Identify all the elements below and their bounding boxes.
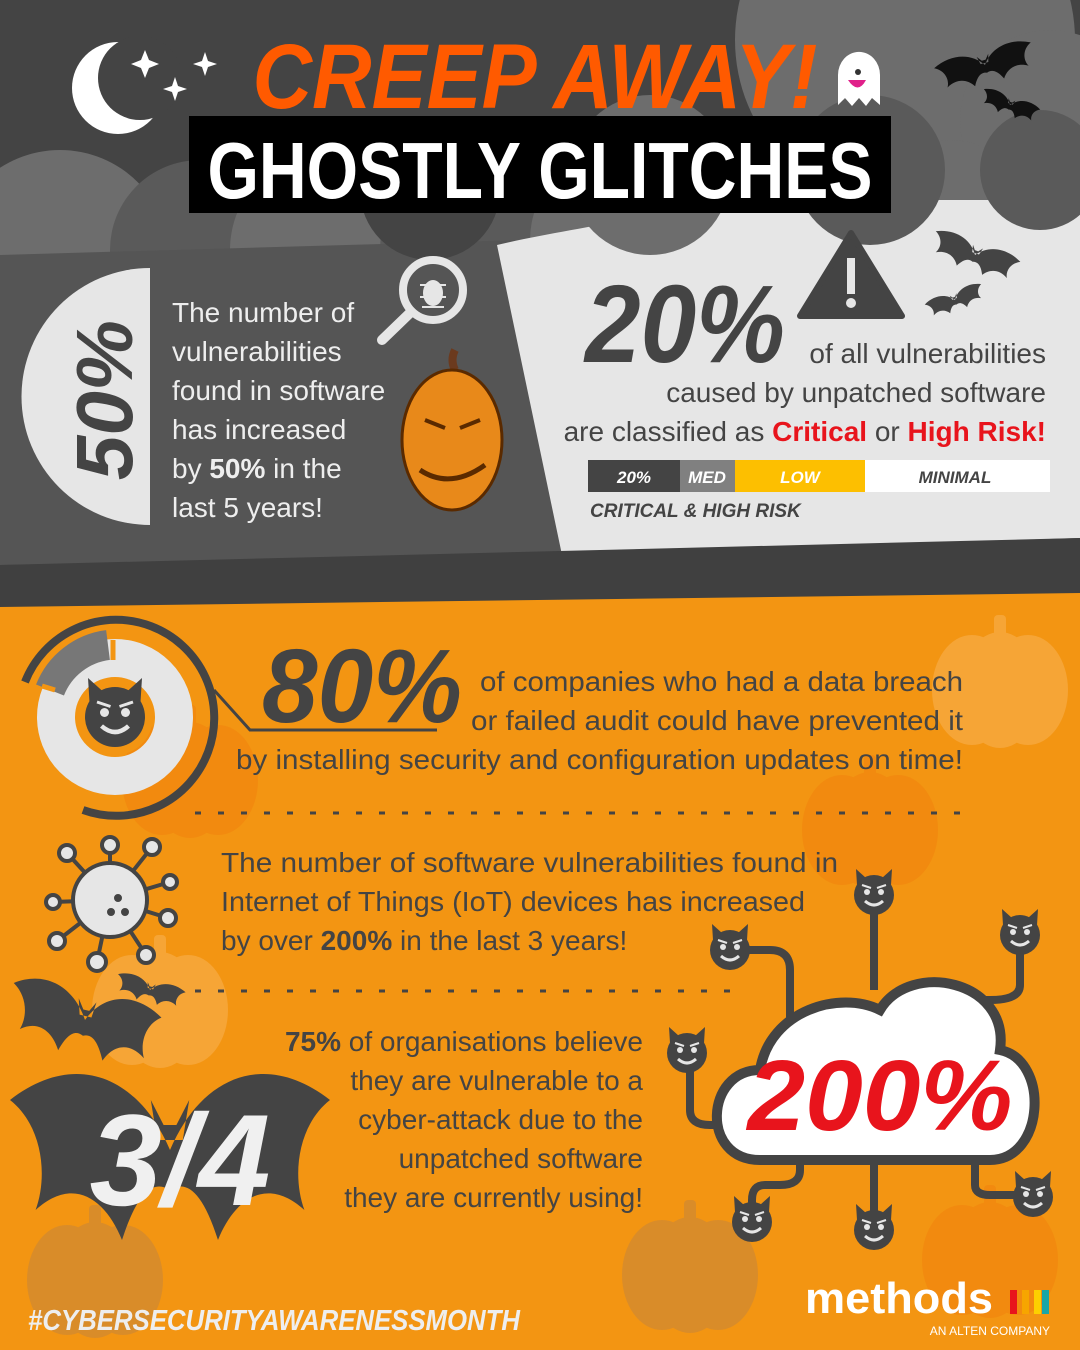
stat: 80%: 80%	[262, 628, 462, 745]
text: IoT	[221, 847, 838, 956]
text: 80%	[236, 666, 963, 775]
panel: left dark	[0, 240, 565, 565]
network cloud: 200%	[745, 1040, 1012, 1152]
risk bar: 20%	[616, 468, 651, 487]
hashtag: #CYBERSECURITYAWARENESSMONTH	[28, 1305, 521, 1337]
text: 80%: by installing security and configuration updates on time!	[236, 744, 963, 775]
text: 75%	[285, 1026, 643, 1213]
dark band	[0, 538, 1080, 610]
icon: ghost	[838, 52, 880, 106]
text: IoT: Internet of Things (IoT) devices has increased	[221, 886, 805, 917]
network cloud	[667, 869, 1053, 1250]
text: 20%: of all vulnerabilities	[809, 338, 1046, 369]
risk bar: MINIMAL	[919, 468, 991, 487]
logo: methods: methods	[805, 1274, 993, 1323]
icon: pumpkin	[402, 350, 502, 510]
text: 75%: unpatched software	[399, 1143, 643, 1174]
text: 75%: they are vulnerable to a	[350, 1065, 643, 1096]
icon: bats top right	[933, 37, 1041, 125]
risk bar: LOW	[780, 468, 822, 487]
stat: 50% semicircle: 50%	[60, 320, 149, 480]
text: 50%: The number of	[172, 297, 354, 328]
text: 20%: caused by unpatched software	[666, 377, 1046, 408]
logo: methods	[805, 1274, 1050, 1338]
stat: 20%: 20%	[583, 263, 785, 386]
stat: 50% semicircle	[21, 268, 150, 525]
donut chart	[25, 620, 437, 816]
icon: warning	[800, 233, 902, 316]
clouds	[0, 0, 1080, 370]
text: 50%: last 5 years!	[172, 492, 323, 523]
stat: 3/4: 3/4	[90, 1087, 270, 1233]
text: 50%: has increased	[172, 414, 346, 445]
text: 75%: they are currently using!	[344, 1182, 643, 1213]
icon: magnifier bug	[382, 260, 463, 340]
risk bar: MED	[688, 468, 726, 487]
text: 20%	[564, 338, 1046, 447]
background top	[0, 0, 1080, 620]
risk bar	[588, 460, 1050, 492]
text: 50%	[172, 297, 385, 523]
title: ghostly glitches: GHOSTLY GLITCHES	[208, 126, 872, 215]
background pumpkins	[92, 615, 1068, 1068]
text: 20%: are classified as Critical or High Risk!	[564, 416, 1046, 447]
text: 50%: by 50% in the	[172, 453, 342, 484]
icon: bats left	[6, 971, 330, 1240]
icon: bats right	[924, 227, 1022, 320]
label: critical & high risk: CRITICAL & HIGH RISK	[590, 501, 802, 522]
logo: methods: AN ALTEN COMPANY	[930, 1324, 1050, 1338]
text: 75%: cyber-attack due to the	[358, 1104, 643, 1135]
panel: right light	[497, 200, 1080, 555]
text: 80%: of companies who had a data breach	[480, 666, 963, 697]
text: IoT: by over 200% in the last 3 years!	[221, 925, 627, 956]
icon: moon and stars	[72, 36, 217, 134]
text: 75%: 75% of organisations believe	[285, 1026, 643, 1057]
text: 50%: vulnerabilities	[172, 336, 342, 367]
panel: orange bottom	[0, 593, 1080, 1350]
icon: virus	[46, 837, 177, 971]
text: IoT: The number of software vulnerabilities found in	[221, 847, 838, 878]
title: creep away: CREEP AWAY!	[252, 26, 818, 128]
cloud overlay bottom edges	[360, 95, 1080, 260]
text: 80%: or failed audit could have prevented it	[471, 705, 963, 736]
text: 50%: found in software	[172, 375, 385, 406]
